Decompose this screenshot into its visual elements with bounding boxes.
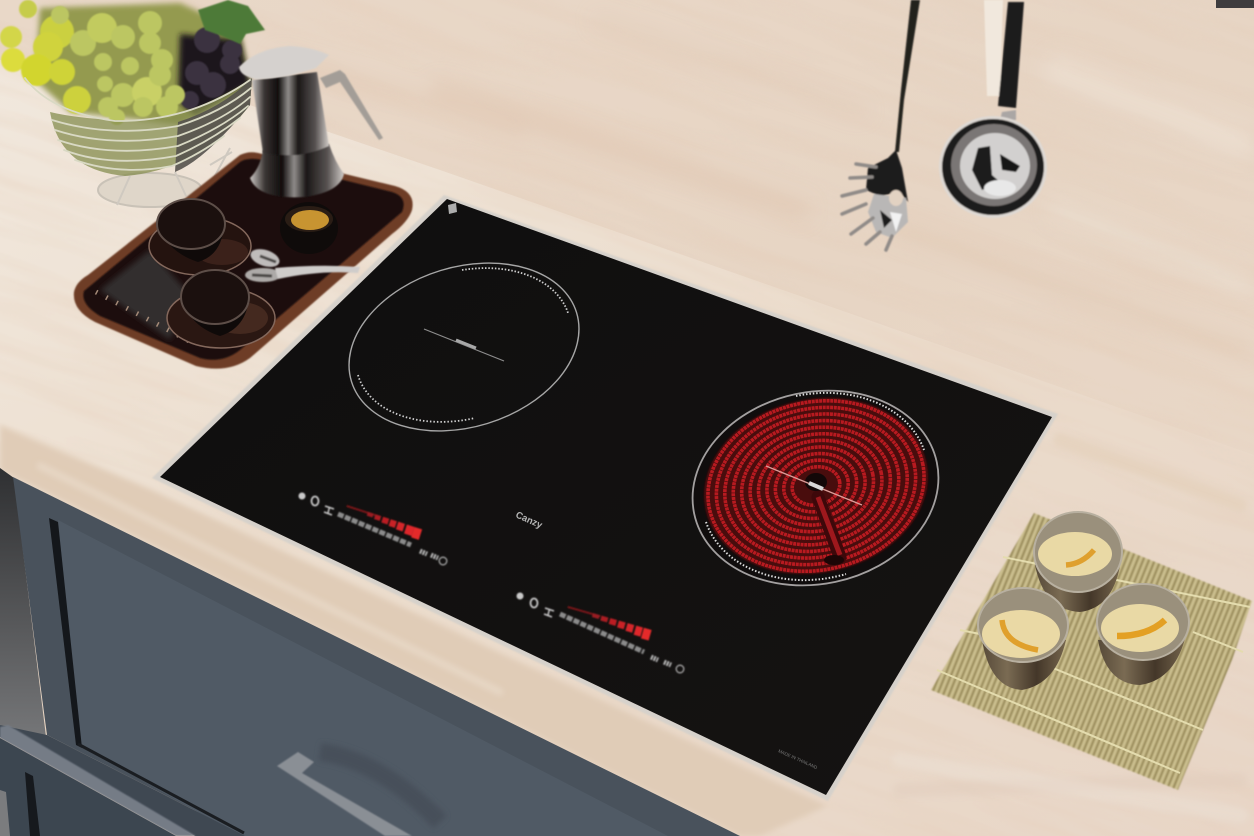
custard cup left (978, 588, 1068, 690)
hob steel frame (152, 195, 1058, 801)
tray rim (74, 152, 413, 369)
basket foot (98, 148, 232, 207)
wicker stitches (96, 292, 195, 344)
green grapes (0, 0, 185, 125)
radiant dots bottom (706, 522, 846, 580)
fruit basket with grapes (0, 0, 265, 207)
ladle bowl (939, 116, 1047, 218)
hob (152, 195, 1058, 801)
right control strip (517, 593, 684, 673)
induction zone (328, 236, 600, 458)
brand logo: Canzy (514, 510, 544, 531)
induction ring (328, 236, 600, 458)
element slot (818, 497, 840, 557)
wall colour streaks (280, 20, 1240, 350)
terminal dark spot (824, 555, 844, 565)
cabinet (0, 477, 740, 836)
custard cup right (1097, 584, 1189, 685)
lock and power icons (517, 593, 554, 617)
panel shadow slit (49, 518, 82, 748)
bamboo mat (931, 513, 1252, 790)
spoon tines (842, 164, 892, 250)
slider track (560, 614, 644, 652)
spoon handle (895, 0, 920, 152)
cabinet frame (13, 477, 740, 836)
corner badge (448, 203, 457, 214)
first coffee cup (149, 199, 251, 275)
wire bowl (25, 78, 252, 176)
handle shadow (320, 752, 440, 822)
custard cup top (1034, 512, 1122, 612)
lower drawer (0, 738, 176, 836)
ladle handle (998, 2, 1024, 108)
radiant dots top (796, 393, 924, 450)
ladle shadow (984, 0, 1003, 96)
tray base (83, 159, 404, 360)
induction dots top (462, 268, 568, 313)
plus and timer icons (420, 551, 438, 558)
vine leaf (198, 0, 265, 44)
small spice bowl (280, 202, 338, 254)
slider track (338, 514, 411, 545)
countertop veining (40, 440, 1240, 815)
pot lid (239, 46, 329, 79)
lower frame band (0, 725, 245, 836)
spoons (245, 246, 360, 282)
hob glass (160, 199, 1052, 795)
spoon head dark (866, 150, 908, 202)
power level wedge (344, 505, 422, 540)
off button (439, 557, 447, 565)
off button (676, 665, 684, 673)
serving spoon hanging (842, 0, 920, 250)
slit under the panel (78, 744, 244, 833)
countertop front edge (0, 425, 827, 836)
radiant outer ring (674, 368, 957, 608)
second coffee cup (167, 270, 275, 348)
ladle hanging (939, 0, 1047, 218)
lock and power icons (299, 493, 334, 515)
spoon head silver (868, 194, 908, 238)
heating element (687, 377, 945, 595)
left control strip (299, 493, 447, 565)
radiant zone (674, 368, 957, 608)
pot body (252, 72, 329, 155)
power level wedge (565, 606, 652, 641)
dark upper corner (1216, 0, 1254, 8)
drawer front (58, 520, 668, 836)
induction centre line (424, 329, 504, 361)
pot base (250, 144, 344, 197)
grape backing (35, 3, 250, 125)
induction dots bottom (358, 375, 475, 422)
radiant centre line (766, 466, 862, 505)
lower floor sliver (0, 790, 10, 836)
centre hole (805, 473, 827, 491)
lower slit (25, 772, 40, 836)
dark grape backing (178, 34, 250, 116)
tray mat sheen (100, 250, 190, 340)
mat strings (937, 557, 1250, 773)
pot handle (320, 70, 383, 140)
floor at left (0, 468, 47, 745)
wicker tray (74, 152, 413, 369)
bamboo mat with dessert cups (931, 512, 1252, 790)
radiant centre mark (809, 483, 823, 489)
origin label: MADE IN THAILAND (778, 748, 819, 770)
lower drawer rail (0, 725, 196, 836)
dark grapes (181, 27, 242, 109)
moka pot (239, 46, 383, 197)
induction centre mark (456, 340, 476, 348)
drawer handle (277, 752, 412, 836)
plus and timer icons (651, 657, 671, 665)
